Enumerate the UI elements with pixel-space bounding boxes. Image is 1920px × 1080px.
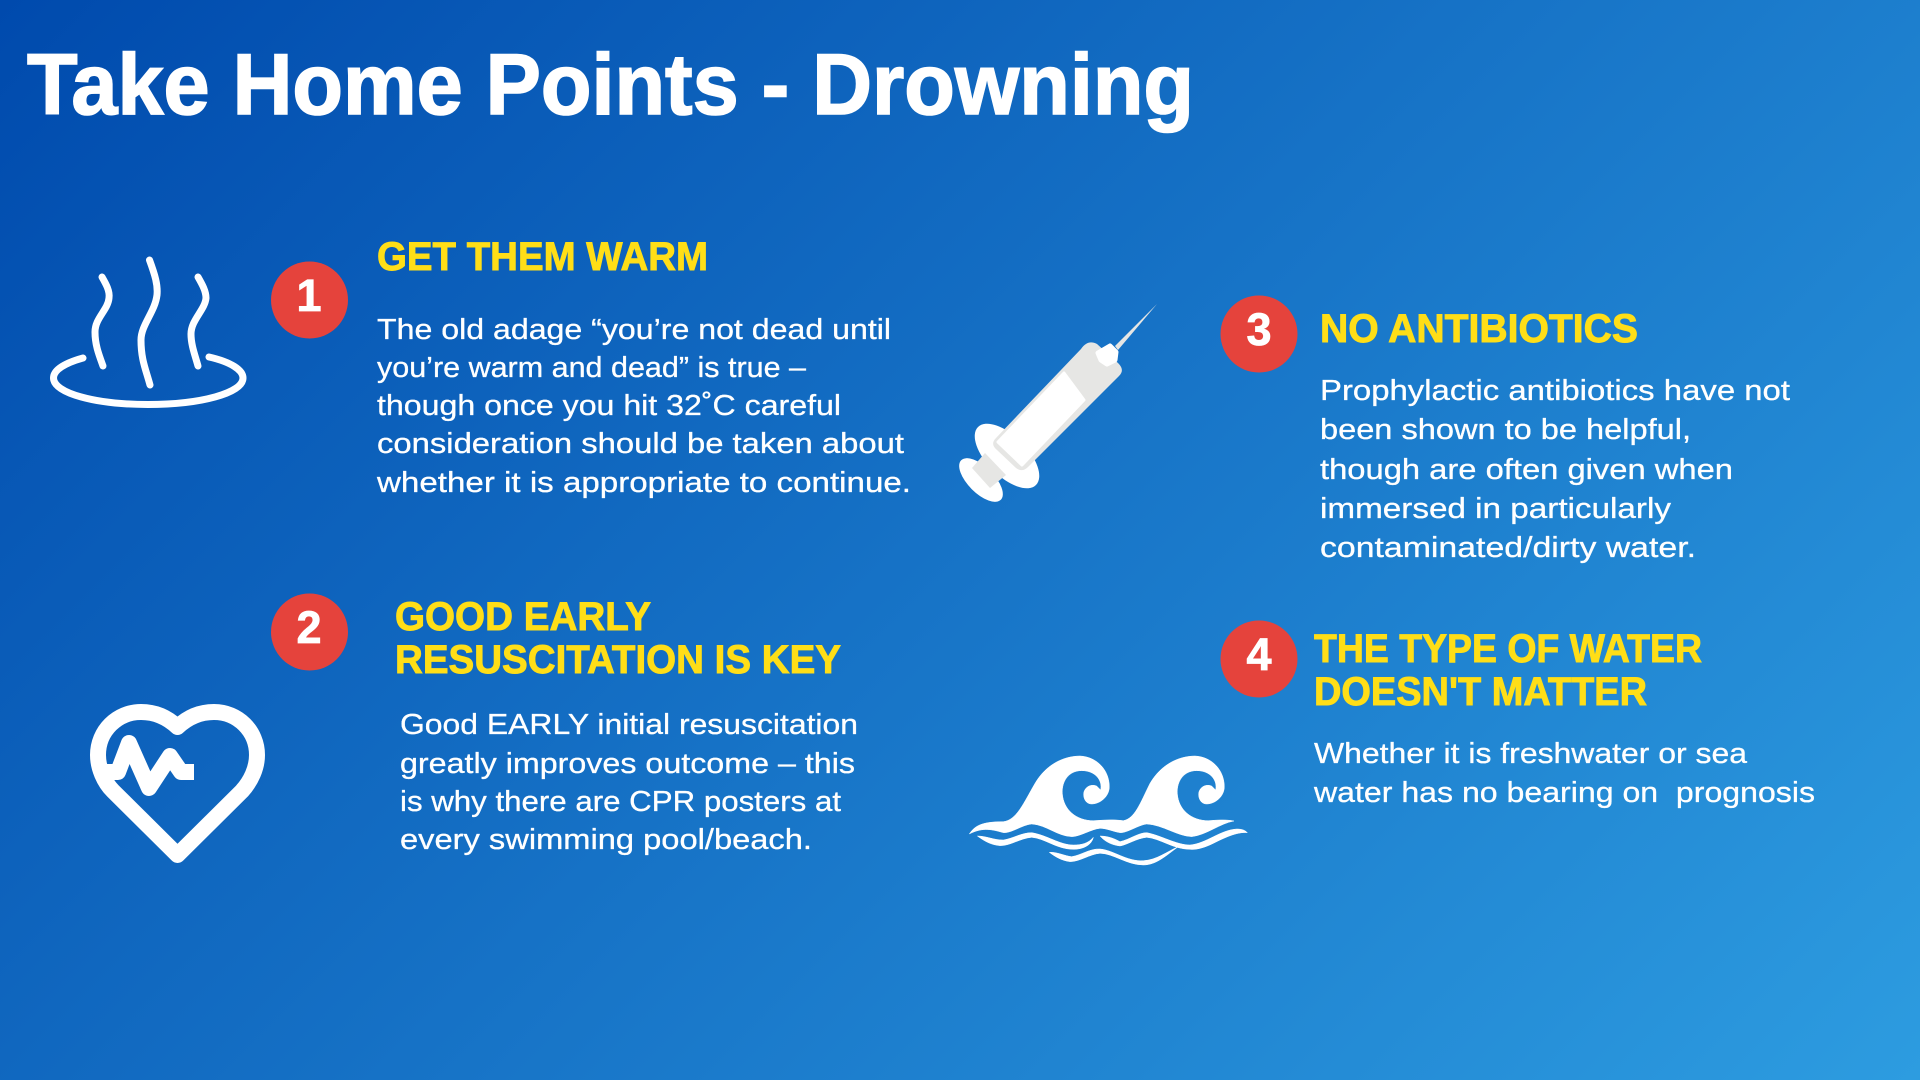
body text: greatly improves outcome – this [400,748,855,780]
body text [1320,375,1790,564]
heading: no antibiotics: NO ANTIBIOTICS [1320,307,1638,351]
title: Take Home Points - Drowning [27,37,1194,133]
body text: Prophylactic antibiotics have not [1320,375,1790,407]
heading: the type of water doesn't matter: DOESN'T MATTER [1314,670,1647,714]
number badge 1: 1 [296,270,322,321]
body text: whether it is appropriate to continue. [376,467,911,499]
panel: get them warm [54,235,911,499]
number badge 4 [1220,620,1298,698]
heading: good early resuscitation is key: RESUSCITATION IS KEY [395,638,841,682]
body text: consideration should be taken about [377,428,904,460]
icon: steam [54,260,243,404]
number badge 1 [271,262,348,338]
body text: every swimming pool/beach. [400,824,812,856]
body text: though once you hit 32˚C careful [377,390,841,422]
number badge 3 [1220,296,1298,372]
body text: contaminated/dirty water. [1320,532,1696,564]
heading: get them warm: GET THEM WARM [377,235,708,279]
icon: waves [969,756,1247,865]
panel: type of water [969,620,1815,865]
body text: you’re warm and dead” is true – [377,352,807,384]
panel: good early resuscitation [98,594,858,856]
body text: The old adage “you’re not dead until [377,314,891,346]
body text [1313,738,1815,809]
number badge 2: 2 [296,602,322,653]
heading: good early resuscitation is key: GOOD EARLY [395,595,651,639]
body text [400,709,858,856]
number badge 3: 3 [1246,304,1272,355]
body text: though are often given when [1320,454,1733,486]
icon: heart with pulse [98,712,257,855]
heading: the type of water doesn't matter [1314,627,1702,714]
body text [376,314,911,499]
heading: good early resuscitation is key [395,595,841,682]
body text: been shown to be helpful, [1320,414,1691,446]
body text: is why there are CPR posters at [400,786,841,818]
body text: immersed in particularly [1320,493,1672,525]
body text: water has no bearing on prognosis [1313,777,1815,809]
panel: no antibiotics [1220,296,1790,564]
body text: Good EARLY initial resuscitation [400,709,858,741]
number badge 4: 4 [1246,629,1272,680]
number badge 2 [271,594,348,670]
icon: syringe [952,304,1157,509]
heading: the type of water doesn't matter: THE TYPE OF WATER [1314,627,1702,671]
body text: Whether it is freshwater or sea [1314,738,1748,770]
